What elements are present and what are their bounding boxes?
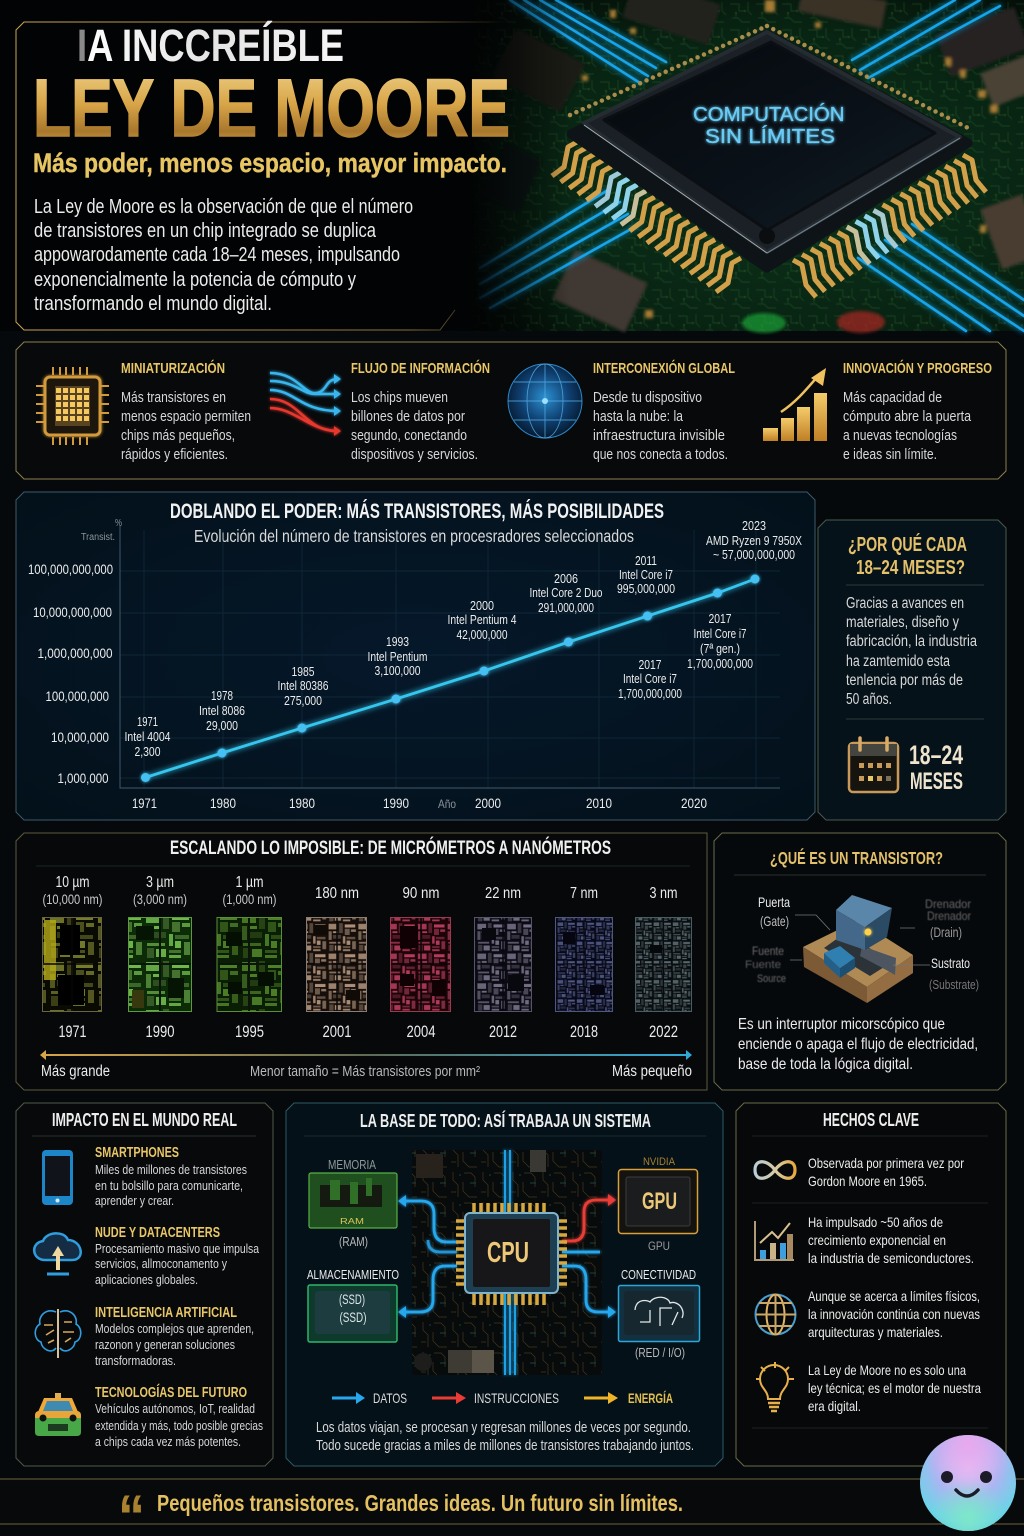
data labels: Intel 8086 [199, 703, 245, 718]
text: nube y datacenters: Procesamiento masivo que impulsa [95, 1241, 260, 1256]
text: interconexión global: que nos conecta a todos. [593, 447, 728, 463]
data labels: 2006 [554, 571, 578, 586]
data labels: 2,300 [134, 744, 160, 759]
years: 1995 [235, 1023, 264, 1041]
panel: real world impact [16, 1103, 273, 1466]
text: tecnologías del futuro: TECNOLOGÍAS DEL FUTURO [95, 1384, 247, 1401]
die 2001 [306, 917, 367, 1012]
heading: ¿POR QUÉ CADA [848, 533, 967, 556]
diagram: transistor structure [790, 895, 930, 1003]
component: memory [309, 1158, 397, 1249]
diagram labels: (Drain) [930, 924, 962, 940]
intro paragraph: appowarodamente cada 18–24 meses, impulsando [34, 244, 400, 266]
text: smartphones: en tu bolsillo para comunicarte, [95, 1178, 243, 1193]
heading: ESCALANDO LO IMPOSIBLE: DE MICRÓMETROS A NANÓMETROS [170, 837, 611, 859]
die 1971 [42, 917, 102, 1012]
data labels: 1,700,000,000 [618, 686, 682, 701]
legend [332, 1390, 673, 1406]
data labels: 2023 [742, 518, 766, 533]
component: GPU [618, 1156, 698, 1253]
icon: globe [756, 1294, 796, 1335]
legend: INSTRUCCIONES [474, 1390, 559, 1406]
size arrow [40, 1050, 692, 1060]
text: inteligencia artificial: razonon y generan soluciones [95, 1337, 235, 1352]
process sizes: 90 nm [402, 885, 440, 902]
text: tecnologías del futuro: a chips cada vez más potentes. [95, 1434, 241, 1449]
axis labels: Año [438, 797, 456, 811]
closing line: Pequeños transistores. Grandes ideas. Un futuro sin límites. [157, 1490, 683, 1516]
text: flujo de información: FLUJO DE INFORMACIÓN [351, 359, 490, 377]
component: storage: (SSD) [339, 1292, 365, 1307]
icon: smartphone [42, 1150, 73, 1205]
axis labels: 1980 [289, 795, 315, 811]
heading: ¿QUÉ ES UN TRANSISTOR? [770, 847, 943, 868]
data labels: Intel Core 2 Duo [530, 585, 602, 600]
text: fact three: Aunque se acerca a límites físicos, [808, 1288, 980, 1304]
text: fact three: la innovación continúa con nuevas [808, 1306, 980, 1322]
panel: scaling from micrometers to nanometers [16, 833, 707, 1090]
text: fact three [808, 1288, 980, 1340]
component: GPU: GPU [642, 1188, 677, 1215]
axis labels: 2020 [681, 795, 707, 811]
data labels: Intel Core i7 [619, 567, 673, 582]
data labels: Intel Pentium [368, 649, 428, 664]
die images [42, 917, 692, 1012]
caption [316, 1420, 694, 1454]
legend: ENERGÍA [628, 1390, 673, 1406]
data labels: 1971 [137, 714, 158, 729]
data labels: Intel 4004 [124, 729, 170, 744]
die 1990 [128, 917, 192, 1012]
component: connectivity: (RED / I/O) [635, 1346, 685, 1360]
process sizes: (10,000 nm) [42, 892, 102, 907]
text: innovación y progreso: cómputo abre la puerta [843, 409, 972, 425]
text: smartphones: aprender y crear. [95, 1193, 174, 1208]
component: memory: (RAM) [339, 1235, 368, 1249]
diagram labels: Puerta [758, 894, 790, 910]
icon: growth chart [755, 1221, 794, 1260]
scale captions [41, 1063, 692, 1080]
heading [848, 533, 967, 579]
description [738, 1016, 978, 1073]
body text: ha zamtemido esta [846, 653, 950, 670]
text: fact two [808, 1214, 974, 1266]
text: flujo de información: Los chips mueven [351, 390, 448, 406]
axis labels: 10,000,000 [51, 729, 109, 745]
big number: MESES [910, 768, 963, 795]
process sizes: 22 nm [485, 885, 521, 902]
years [58, 1023, 678, 1041]
processor pins: upper beads [570, 26, 972, 130]
text: nube y datacenters: NUDE Y DATACENTERS [95, 1225, 220, 1241]
component: GPU: GPU [648, 1239, 670, 1253]
intro paragraph: exponencialmente la potencia de cómputo y [34, 269, 356, 291]
big number [909, 740, 963, 795]
process sizes: (1,000 nm) [222, 892, 276, 907]
processor body [571, 34, 968, 268]
process sizes: 7 nm [570, 885, 598, 902]
process sizes: (3,000 nm) [133, 892, 187, 907]
title: LEY DE MOORE [33, 63, 510, 154]
heading: HECHOS CLAVE [823, 1110, 919, 1130]
text: fact one [808, 1155, 964, 1189]
axis labels [28, 518, 707, 811]
icon: brain [35, 1309, 81, 1358]
axis labels: Transist. [81, 532, 115, 543]
panel: key facts [736, 1103, 1006, 1466]
subtitle: Más poder, menos espacio, mayor impacto. [33, 148, 507, 178]
text: miniaturización: menos espacio permiten [121, 409, 251, 425]
data labels: Intel Core i7 [694, 626, 746, 641]
text: smartphones [95, 1145, 247, 1208]
component: connectivity: CONECTIVIDAD [621, 1268, 696, 1282]
data labels: 29,000 [206, 718, 238, 733]
axis labels: 1,000,000,000 [38, 645, 113, 661]
caption: Los datos viajan, se procesan y regresan millones de veces por segundo. [316, 1420, 691, 1436]
scale captions: Más pequeño [612, 1063, 692, 1080]
icon: light bulb [756, 1362, 794, 1411]
diagram labels: (Gate) [760, 913, 789, 929]
diagram labels: Sustrato [931, 955, 970, 971]
icon: growth bars [763, 368, 827, 441]
process sizes: 180 nm [315, 885, 359, 902]
text: flujo de información: segundo, conectando [351, 428, 467, 444]
data labels: Intel Pentium 4 [448, 612, 516, 627]
big number: 18–24 [909, 740, 963, 770]
diagram labels: Fuente [752, 944, 784, 958]
die 2012 [474, 917, 532, 1012]
process sizes: 10 µm [56, 874, 90, 891]
text: tecnologías del futuro: extendida y más, todo posible grecias [95, 1418, 263, 1433]
data labels: 3,100,000 [374, 663, 420, 678]
data labels: 995,000,000 [617, 581, 675, 596]
axis labels: 10,000,000,000 [33, 604, 112, 620]
text: interconexión global: Desde tu dispositivo [593, 390, 702, 406]
axis labels: 2000 [475, 795, 501, 811]
CPU: CPU [487, 1237, 529, 1269]
process sizes [42, 874, 678, 907]
text: innovación y progreso [843, 359, 992, 463]
axis labels: 100,000,000,000 [28, 561, 113, 577]
die 1995 [216, 917, 282, 1012]
years: 1971 [58, 1023, 86, 1041]
description: enciende o apaga el flujo de electricidad, [738, 1036, 978, 1053]
data labels [124, 518, 802, 759]
data labels: 2000 [470, 598, 494, 613]
component: memory: MEMORIA [328, 1158, 377, 1172]
data labels: (7ª gen.) [700, 641, 740, 656]
text: fact two: la industria de semiconductores. [808, 1250, 974, 1266]
data labels: Intel 80386 [278, 678, 328, 693]
panel: what is a transistor [714, 833, 1006, 1090]
body text: Gracias a avances en [846, 595, 964, 612]
process sizes: 3 µm [146, 874, 174, 891]
axis labels: 1,000,000 [58, 770, 109, 786]
body text [846, 595, 977, 708]
text: miniaturización: rápidos y eficientes. [121, 447, 228, 463]
years: 2004 [406, 1023, 436, 1041]
CPU [456, 1203, 567, 1305]
text: inteligencia artificial: transformadoras. [95, 1353, 176, 1368]
text: fact four: era digital. [808, 1398, 861, 1414]
title: IA INCCREÍBLE [77, 20, 344, 71]
text: flujo de información: dispositivos y servicios. [351, 447, 478, 463]
scale captions: Más grande [41, 1063, 110, 1080]
footer band: closing quote [0, 1479, 1024, 1536]
text: fact four: La Ley de Moore no es solo una [808, 1362, 966, 1378]
axis labels: 1971 [132, 795, 157, 811]
data labels: 42,000,000 [456, 627, 508, 642]
data labels: 275,000 [284, 693, 322, 708]
text: inteligencia artificial: INTELIGENCIA ARTIFICIAL [95, 1305, 237, 1321]
component: storage: ALMACENAMIENTO [307, 1268, 399, 1282]
body text: tenlencia por más de [846, 672, 963, 689]
text: nube y datacenters: servicios, allmoconamento y [95, 1256, 227, 1271]
blurred components [482, 0, 1024, 332]
text: fact two: Ha impulsado ~50 años de [808, 1214, 943, 1230]
image: circuit board with processor [430, 0, 1024, 333]
text: flujo de información: billones de datos por [351, 409, 465, 425]
heading: IMPACTO EN EL MUNDO REAL [52, 1110, 237, 1130]
text: interconexión global: hasta la nube: la [593, 409, 684, 425]
icon: cloud [34, 1233, 81, 1274]
text: interconexión global: INTERCONEXIÓN GLOBAL [593, 359, 735, 377]
description: base de toda la lógica digital. [738, 1056, 913, 1073]
die 2004 [390, 917, 451, 1012]
intro paragraph: La Ley de Moore es la observación de que el número [34, 196, 413, 218]
panel: four concepts strip [16, 342, 1006, 479]
component: memory: RAM [340, 1217, 364, 1226]
panel: how a system works [286, 1103, 723, 1466]
data labels: 2011 [635, 553, 657, 568]
data labels: 2017 [708, 611, 732, 626]
panel: why every 18-24 months [818, 520, 1006, 820]
icon: information flow arrows [270, 373, 341, 436]
panel: hero header [0, 0, 1024, 333]
text: flujo de información [351, 359, 490, 463]
years: 1990 [146, 1023, 174, 1041]
diagram labels [745, 894, 979, 992]
text: miniaturización [121, 359, 251, 463]
chip label: SIN LÍMITES [705, 125, 835, 148]
arrows: data and instructions [398, 1194, 616, 1318]
text: fact four: ley técnica; es el motor de nuestra [808, 1380, 981, 1396]
text: interconexión global [593, 359, 735, 463]
chart title: DOBLANDO EL PODER: MÁS TRANSISTORES, MÁS POSIBILIDADES [170, 500, 664, 523]
years: 2022 [649, 1023, 678, 1041]
component: storage: (SSD) [340, 1310, 366, 1325]
text: miniaturización: Más transistores en [121, 390, 226, 406]
years: 2001 [322, 1023, 352, 1041]
text: fact one: Gordon Moore en 1965. [808, 1173, 927, 1189]
text: fact two: crecimiento exponencial en [808, 1232, 946, 1248]
intro paragraph: de transistores en un chip integrado se duplica [34, 220, 377, 242]
text: tecnologías del futuro: Vehículos autónomos, IoT, realidad [95, 1401, 255, 1416]
diagram labels: Fuente [745, 959, 781, 971]
years: 2018 [570, 1023, 598, 1041]
diagram labels: (Substrate) [929, 977, 979, 992]
die 2018 [555, 917, 613, 1012]
text: nube y datacenters [95, 1225, 260, 1287]
icon: miniaturized chip [36, 367, 109, 445]
diagram labels: Drenador [925, 897, 971, 911]
years: 2012 [489, 1023, 517, 1041]
component: connectivity [618, 1268, 700, 1360]
heading: LA BASE DE TODO: ASÍ TRABAJA UN SISTEMA [360, 1110, 651, 1131]
data labels: 1993 [386, 634, 409, 649]
text: smartphones: Miles de millones de transistores [95, 1162, 247, 1177]
text: innovación y progreso: a nuevas tecnologías [843, 428, 957, 444]
axis labels: 2010 [586, 795, 612, 811]
text: innovación y progreso: e ideas sin límite. [843, 447, 937, 463]
diagram labels: Drenador [927, 909, 971, 923]
text: inteligencia artificial: Modelos complejos que aprenden, [95, 1321, 254, 1336]
data labels: 2017 [638, 657, 662, 672]
axis labels: 1980 [210, 795, 236, 811]
chip label [693, 103, 844, 148]
legend: DATOS [373, 1390, 407, 1406]
heading: 18–24 MESES? [856, 557, 965, 579]
body text: fabricación, la industria [846, 633, 977, 650]
scale captions: Menor tamaño = Más transistores por mm² [250, 1064, 480, 1080]
data labels: Intel Core i7 [623, 671, 677, 686]
data labels: 1978 [211, 688, 233, 703]
description: Es un interruptor micorscópico que [738, 1016, 945, 1033]
icon: autonomous car [35, 1393, 81, 1436]
die 2022 [635, 917, 692, 1012]
text: fact three: arquitecturas y materiales. [808, 1324, 943, 1340]
text: nube y datacenters: aplicaciones globales. [95, 1272, 198, 1287]
text: miniaturización: chips más pequeños, [121, 428, 235, 444]
diagram labels: Source [757, 973, 786, 985]
caption: Todo sucede gracias a miles de millones de transistores trabajando juntos. [316, 1438, 694, 1454]
icon: blue globe [508, 364, 582, 438]
axis labels: % [115, 518, 122, 529]
chart subtitle: Evolución del número de transistores en procesradores seleccionados [194, 526, 634, 546]
text: fact four [808, 1362, 981, 1414]
component: storage [307, 1268, 399, 1342]
axis labels: 1990 [383, 795, 409, 811]
text: tecnologías del futuro [95, 1384, 263, 1449]
text: innovación y progreso: Más capacidad de [843, 390, 942, 406]
panel: transistor growth chart [16, 492, 815, 820]
icon: infinity [755, 1162, 795, 1178]
line chart [28, 518, 802, 811]
icon: calendar [849, 738, 898, 792]
body text: materiales, diseño y [846, 614, 959, 631]
mascot: smiling bubble [920, 1435, 1016, 1531]
data line [146, 579, 755, 778]
chip label: COMPUTACIÓN [693, 103, 844, 126]
processor pins: lower left [552, 142, 741, 292]
text: fact one: Observada por primera vez por [808, 1155, 964, 1171]
body text: 50 años. [846, 691, 892, 708]
axis labels: 100,000,000 [46, 688, 109, 704]
circuit board [412, 1150, 602, 1375]
data points [141, 574, 760, 782]
process sizes: 3 nm [650, 885, 678, 902]
data labels: ~ 57,000,000,000 [713, 547, 795, 562]
text: interconexión global: infraestructura invisible [593, 428, 725, 444]
text: smartphones: SMARTPHONES [95, 1145, 179, 1161]
intro paragraph: transformando el mundo digital. [34, 293, 272, 315]
processor pins: lower right [793, 155, 986, 297]
component: GPU: NVIDIA [643, 1156, 676, 1168]
data labels: 1,700,000,000 [687, 656, 753, 671]
process sizes: 1 µm [236, 874, 264, 891]
intro paragraph [34, 196, 413, 315]
circuit traces: X of blue light [480, 0, 1024, 331]
data labels: 291,000,000 [538, 600, 594, 615]
title [33, 20, 510, 154]
data labels: AMD Ryzen 9 7950X [706, 533, 802, 548]
text: miniaturización: MINIATURIZACIÓN [121, 359, 225, 377]
text: inteligencia artificial [95, 1305, 254, 1368]
data labels: 1985 [292, 664, 314, 679]
